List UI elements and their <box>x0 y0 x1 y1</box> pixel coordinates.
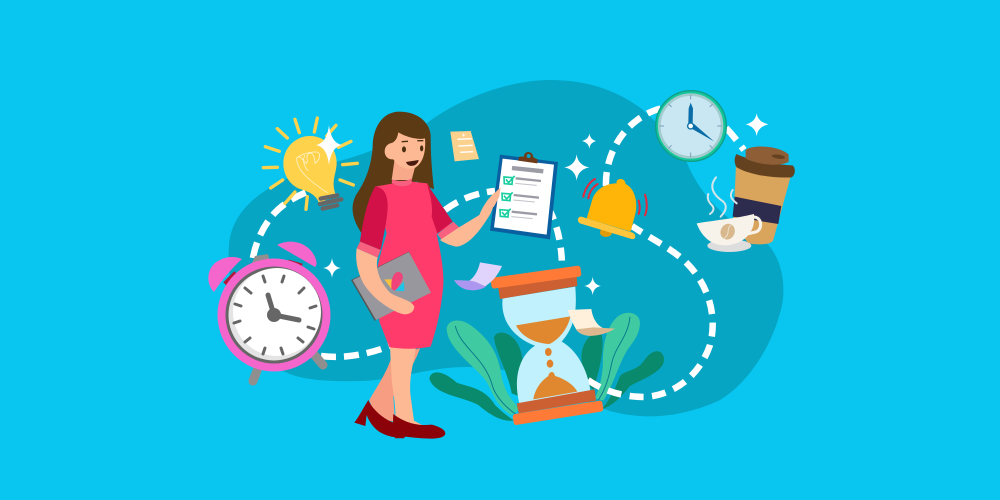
checkboxes <box>500 176 515 217</box>
sand drops <box>545 348 552 356</box>
hair back <box>353 112 434 233</box>
bulb glass <box>283 136 337 203</box>
clipboard paper <box>494 159 554 235</box>
lightbulb <box>263 118 357 209</box>
hourglass <box>454 262 615 425</box>
bell body <box>587 179 636 232</box>
face <box>385 132 425 169</box>
clock face <box>227 268 321 362</box>
hourglass glass <box>502 287 591 403</box>
bulb filament <box>297 152 327 193</box>
right cuff <box>437 222 459 242</box>
plant: back leaves <box>429 333 664 421</box>
neck <box>392 157 416 180</box>
clipboard board <box>490 155 558 239</box>
dress <box>375 182 450 349</box>
sparkle: alarm <box>323 258 341 278</box>
bell rim <box>578 217 635 239</box>
dashed path <box>253 108 744 397</box>
paper: lilac <box>469 262 502 287</box>
hand thumb <box>482 187 501 213</box>
background blob <box>229 80 783 416</box>
back leg <box>369 348 420 422</box>
clock feet <box>253 352 323 381</box>
woman and clipboard <box>351 112 558 439</box>
back shoe <box>354 400 396 437</box>
sparkle: bulb <box>316 125 342 165</box>
right sleeve <box>427 183 453 233</box>
right cluster: bell, wall clock, coffee <box>564 91 795 252</box>
bulb rays <box>263 118 357 209</box>
coffee mug <box>697 214 761 252</box>
cup lid <box>735 154 795 177</box>
left bell <box>208 257 242 292</box>
clock hands <box>268 295 299 320</box>
clipboard <box>482 152 558 239</box>
clock case <box>218 258 330 372</box>
dress collar <box>392 179 412 186</box>
left sleeve <box>360 187 388 250</box>
clock top knob <box>251 254 270 265</box>
alarm clock <box>208 242 330 381</box>
bell clapper <box>600 228 612 237</box>
steam <box>708 177 737 217</box>
eyes and mouth <box>402 146 406 152</box>
top cap <box>498 275 577 299</box>
note <box>450 131 479 161</box>
woman <box>351 112 501 439</box>
clock ticks <box>234 276 316 354</box>
bulb screw base <box>320 195 341 209</box>
tablet logo <box>384 279 393 290</box>
lower sand <box>533 372 577 399</box>
right bell <box>277 242 316 267</box>
plant: front leaves <box>447 313 640 415</box>
coffee cup <box>733 147 795 244</box>
upper sand <box>516 316 570 344</box>
paper: cream <box>568 309 603 335</box>
clipboard clip <box>518 152 538 163</box>
wall clock <box>656 91 726 161</box>
plants <box>429 313 664 421</box>
left arm and hand <box>356 248 414 314</box>
sparkle: hourglass <box>584 277 601 295</box>
checklist bars <box>511 168 543 219</box>
right arm <box>440 187 501 247</box>
clock bell connectors <box>225 262 302 284</box>
front leg <box>390 347 425 427</box>
left cuff <box>357 242 381 258</box>
bell ringing waves <box>583 179 647 215</box>
sparkles <box>564 113 768 181</box>
front shoe <box>393 414 445 439</box>
bottom cap <box>517 389 596 413</box>
tablet <box>351 252 411 321</box>
cup sleeve <box>733 197 781 224</box>
